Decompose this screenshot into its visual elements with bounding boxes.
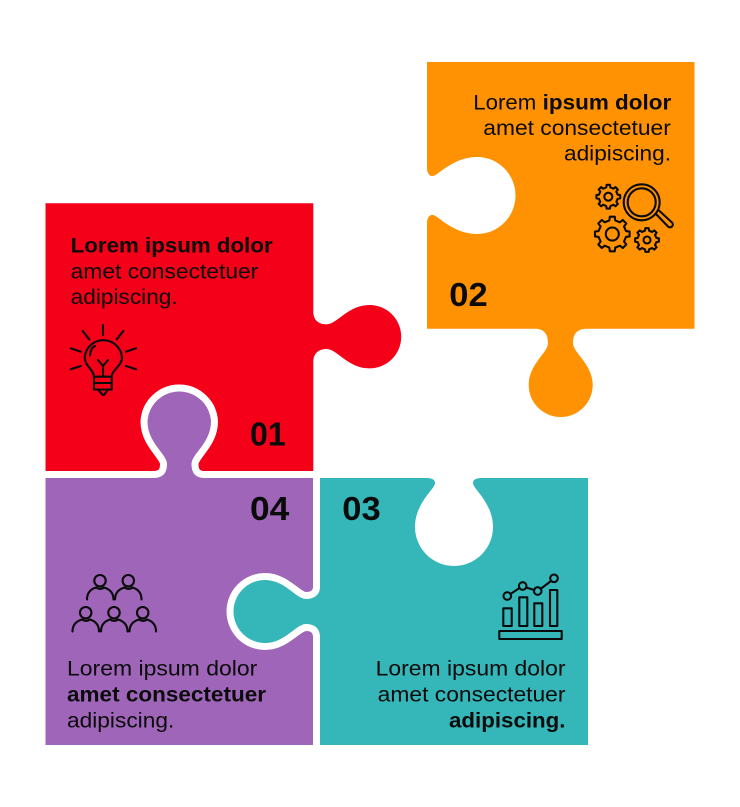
number: 03: 03: [342, 490, 381, 527]
red piece shape: [46, 203, 401, 471]
text: 04 description: Lorem ipsum dolor: [67, 658, 257, 681]
orange piece shape: [427, 62, 694, 417]
text: 01 description: adipiscing.: [71, 286, 178, 309]
text: 03 description: [376, 658, 566, 732]
number: 01: 01: [250, 416, 286, 453]
icon: light bulb: [71, 325, 136, 395]
icon: gears and magnifier: [595, 184, 673, 252]
icon: group of people: [72, 575, 156, 632]
text: 03 description: Lorem ipsum dolor: [376, 658, 566, 681]
text: 04 description: adipiscing.: [67, 709, 174, 732]
panel: 03 teal puzzle piece: [234, 478, 588, 745]
text: 01 description: [71, 234, 273, 309]
text: 02 description: adipiscing.: [564, 143, 671, 166]
icon: bar chart with trend line: [499, 574, 562, 639]
panel: 01 red puzzle piece: [46, 203, 401, 471]
text: 02 description: [473, 91, 671, 166]
text: 01 description: amet consectetuer: [71, 260, 258, 283]
text: 02 description: Lorem: [473, 91, 536, 114]
number: 04: 04: [250, 490, 290, 527]
text: 02 description: amet consectetuer: [483, 117, 671, 140]
panel: 02 orange puzzle piece: [427, 62, 694, 417]
text: 04 description: [67, 658, 266, 732]
teal piece outline and shape: [234, 478, 588, 745]
number: 02: 02: [449, 276, 488, 313]
text: 04 description: amet consectetuer: [67, 684, 266, 707]
text: 03 description: amet consectetuer: [378, 684, 566, 707]
purple piece outline and shape: [46, 391, 313, 745]
text: 03 description: adipiscing.: [449, 709, 566, 732]
text: 01 description: Lorem ipsum dolor: [71, 234, 273, 257]
text: 02 description: ipsum dolor: [543, 91, 671, 114]
panel: 04 purple puzzle piece: [46, 391, 313, 745]
